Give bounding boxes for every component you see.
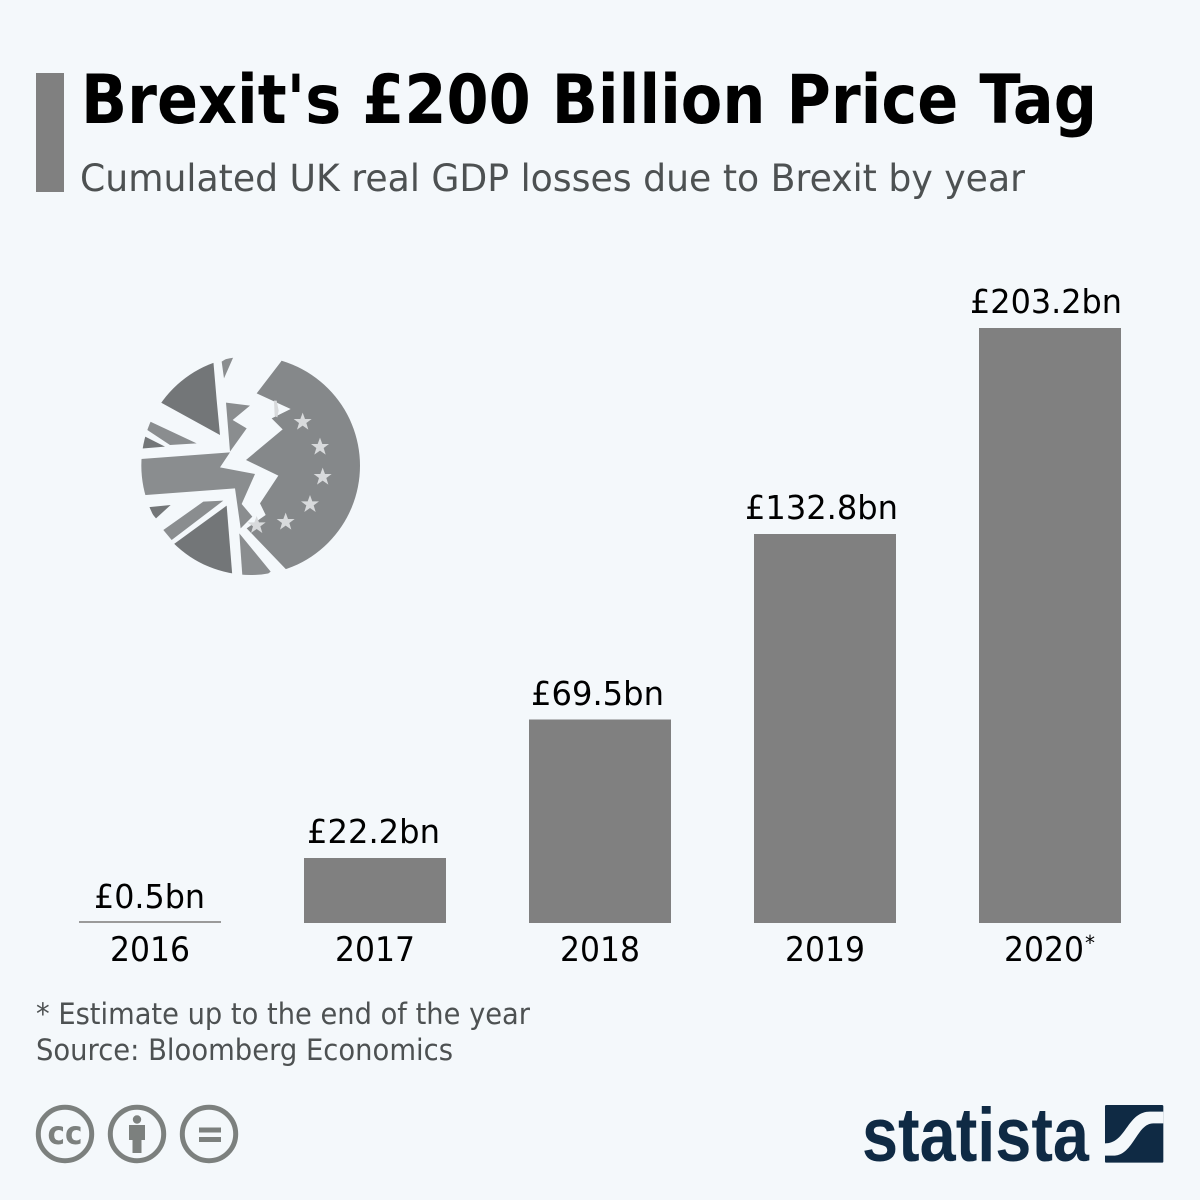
title accent bar xyxy=(36,73,64,192)
year label: 2018: 2018 xyxy=(560,930,640,969)
icon: broken UK and EU flag disc xyxy=(141,358,360,575)
value label: 2016: £0.5bn xyxy=(94,878,205,916)
asterisk on 2020: * xyxy=(1085,931,1095,955)
year label: 2017: 2017 xyxy=(335,930,415,969)
icon: creative commons: cc xyxy=(48,1114,82,1152)
bar: 2016 xyxy=(79,921,221,923)
value label: 2020: £203.2bn xyxy=(970,283,1122,321)
year label: 2020: 2020 xyxy=(1004,930,1084,969)
value label: 2019: £132.8bn xyxy=(745,489,898,527)
statista logo mark xyxy=(1105,1105,1163,1163)
title: Brexit's £200 Billion Price Tag xyxy=(81,61,1097,140)
icon: creative commons xyxy=(38,1107,92,1161)
value label: 2018: £69.5bn xyxy=(531,675,664,713)
value label: 2017: £22.2bn xyxy=(307,813,440,851)
year label: 2016: 2016 xyxy=(110,930,190,969)
bar chart xyxy=(79,283,1122,969)
bar: 2018 xyxy=(529,720,671,923)
footnote: * Estimate up to the end of the year xyxy=(36,997,530,1031)
year label: 2019: 2019 xyxy=(785,930,865,969)
source: Source: Bloomberg Economics xyxy=(36,1033,453,1067)
bar: 2017 xyxy=(304,858,446,923)
icon: no derivatives xyxy=(182,1107,236,1161)
bar: 2019 xyxy=(754,534,896,923)
statista wordmark: statista xyxy=(862,1093,1090,1178)
icon: attribution xyxy=(110,1107,164,1161)
subtitle: Cumulated UK real GDP losses due to Brexit by year xyxy=(80,157,1026,200)
bar: 2020 xyxy=(979,328,1121,923)
